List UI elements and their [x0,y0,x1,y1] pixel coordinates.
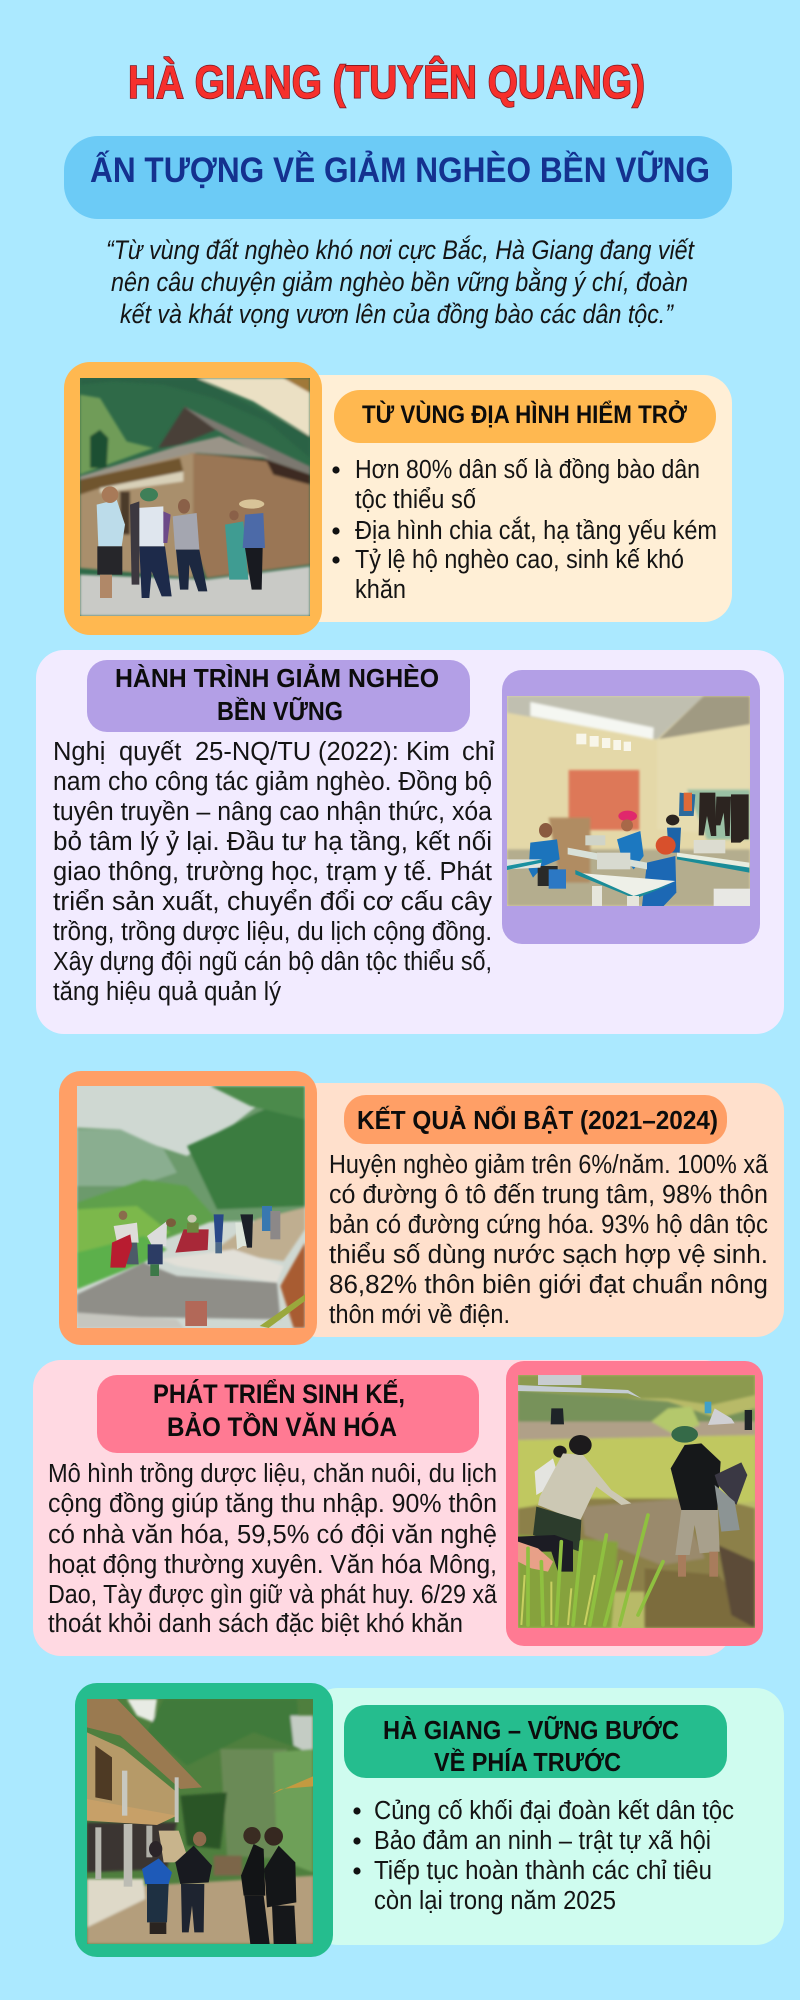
paragraph: quyết [119,738,181,766]
banner: subtitle: ẤN TƯỢNG VỀ GIẢM NGHÈO BỀN VỮNG [90,150,710,190]
bullet list: Tỷ lệ hộ nghèo cao, sinh kế khó [355,546,684,574]
bullet list: Củng cố khối đại đoàn kết dân tộc [374,1797,734,1825]
paragraph: 25-NQ/TU [195,738,311,766]
quote [106,234,695,329]
paragraph: nam cho công tác giảm nghèo. Đồng bộ [53,768,492,796]
paragraph: (2022): [318,738,399,766]
paragraph: cộng đồng giúp tăng thu nhập. 90% thôn [48,1490,497,1518]
paragraph [53,738,495,1006]
quote: kết và khát vọng vươn lên của đồng bào các dân tộc.” [120,299,674,329]
heading pill: BỀN VỮNG [217,696,343,726]
panel: livelihoods and culture [33,1360,763,1656]
photo frame: sewing class [502,670,760,944]
paragraph: Mô hình trồng dược liệu, chăn nuôi, du lịch [48,1460,497,1488]
paragraph: thôn mới về điện. [329,1301,510,1329]
heading pill: BẢO TỒN VĂN HÓA [167,1410,397,1442]
panel: moving forward [75,1683,784,1957]
bullet list [332,456,717,604]
paragraph [329,1151,769,1329]
heading pill [344,1705,727,1778]
paragraph: Huyện nghèo giảm trên 6%/năm. 100% xã [329,1151,769,1179]
photo frame: road building [59,1071,317,1345]
bullet list: khăn [355,576,406,604]
paragraph: chỉ [462,738,495,766]
paragraph: bỏ tâm lý ỷ lại. Đầu tư hạ tầng, kết nối [53,828,492,856]
panel: outstanding results [59,1071,784,1345]
paragraph: có nhà văn hóa, 59,5% có đội văn nghệ [48,1521,497,1549]
paragraph: trồng, trồng dược liệu, du lịch cộng đồng. [53,918,492,946]
bullet list: tộc thiểu số [355,486,476,514]
paragraph: thiểu số dùng nước sạch hợp vệ sinh. [329,1241,768,1269]
bullet list [353,1797,734,1915]
paragraph: Xây dựng đội ngũ cán bộ dân tộc thiểu số, [53,948,492,976]
bullet list: Bảo đảm an ninh – trật tự xã hội [374,1827,711,1855]
paragraph [48,1460,498,1638]
paragraph: có đường ô tô đến trung tâm, 98% thôn [329,1181,768,1209]
bullet list: còn lại trong năm 2025 [374,1887,616,1915]
banner: subtitle [64,136,732,219]
bullet list: Hơn 80% dân số là đồng bào dân [355,456,700,484]
paragraph: giao thông, trường học, trạm y tế. Phát [53,858,492,886]
paragraph: tăng hiệu quả quản lý [53,978,281,1006]
paragraph: hoạt động thường xuyên. Văn hóa Mông, [48,1551,497,1579]
heading pill [344,1095,727,1144]
paragraph: thoát khỏi danh sách đặc biệt khó khăn [48,1610,463,1638]
heading pill: HÀNH TRÌNH GIẢM NGHÈO [115,663,439,693]
quote: nên câu chuyện giảm nghèo bền vững bằng ý chí, đoàn [111,266,688,297]
heading pill: VỀ PHÍA TRƯỚC [434,1747,621,1777]
paragraph: 86,82% thôn biên giới đạt chuẩn nông [329,1271,768,1299]
paragraph: bản có đường cứng hóa. 93% hộ dân tộc [329,1211,768,1239]
bullet list: Tiếp tục hoàn thành các chỉ tiêu [374,1857,712,1885]
panel: sustainable journey [36,650,784,1034]
paragraph: Dao, Tày được gìn giữ và phát huy. 6/29 xã [48,1581,498,1609]
heading pill: KẾT QUẢ NỔI BẬT (2021–2024) [357,1105,718,1135]
title: HÀ GIANG (TUYÊN QUANG) [128,56,645,108]
paragraph: Kim [406,738,450,766]
heading pill: PHÁT TRIỂN SINH KẾ, [153,1378,405,1409]
panel: from rugged terrain [64,362,732,635]
photo frame: house visit [64,362,322,635]
heading pill [87,660,470,732]
quote: “Từ vùng đất nghèo khó nơi cực Bắc, Hà Giang đang viết [106,234,695,265]
heading pill [334,390,716,443]
paragraph: Nghị [53,738,105,766]
heading pill: TỪ VÙNG ĐỊA HÌNH HIỂM TRỞ [362,399,688,429]
paragraph: tuyên truyền – nâng cao nhận thức, xóa [53,798,493,826]
photo frame: stilt house [75,1683,333,1957]
bullet list: Địa hình chia cắt, hạ tầng yếu kém [355,516,717,545]
paragraph: triển sản xuất, chuyển đổi cơ cấu cây [53,888,492,916]
photo frame: rice harvest [506,1361,763,1646]
heading pill [97,1375,479,1453]
heading pill: HÀ GIANG – VỮNG BƯỚC [383,1715,679,1745]
